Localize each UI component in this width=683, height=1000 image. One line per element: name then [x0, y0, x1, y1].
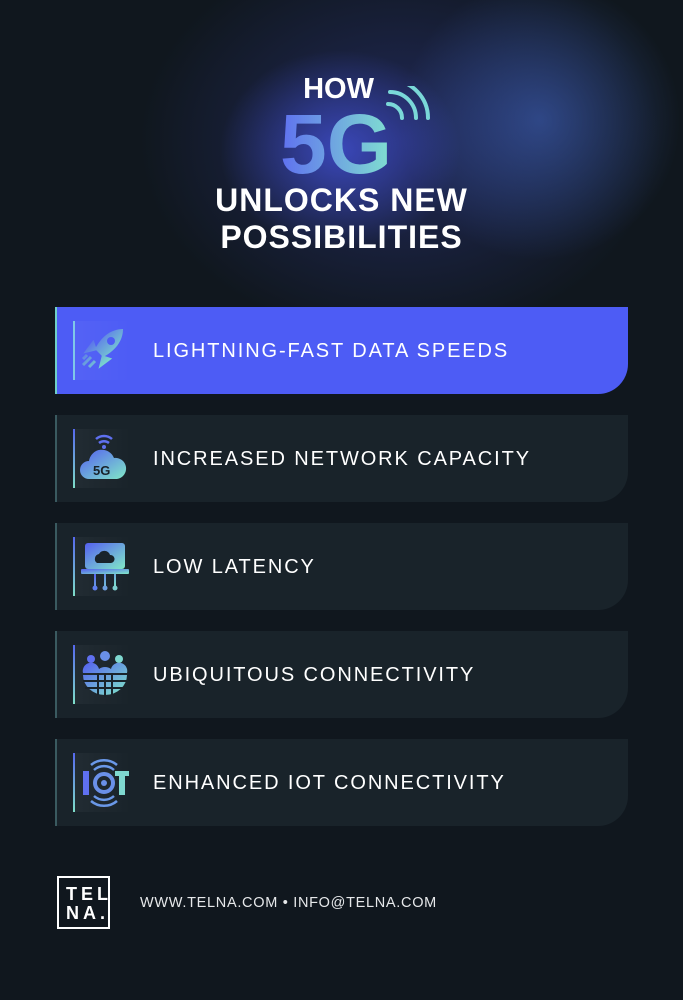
- label: UBIQUITOUS CONNECTIVITY: [153, 664, 475, 686]
- title: UNLOCKS NEW: UNLOCKS NEW: [215, 182, 468, 218]
- footer logo: NA.: [66, 903, 109, 923]
- card: enhanced IoT connectivity: [55, 739, 628, 826]
- label: LOW LATENCY: [153, 556, 316, 578]
- label: INCREASED NETWORK CAPACITY: [153, 448, 531, 470]
- card: increased network capacity: [55, 415, 628, 502]
- icon: IoT: [73, 753, 131, 812]
- icon: people globe: [73, 645, 131, 704]
- icon: 5G cloud: [73, 429, 131, 488]
- footer contact: WWW.TELNA.COM • INFO@TELNA.COM: [140, 895, 437, 911]
- footer logo: [57, 876, 110, 929]
- icon: rocket: [73, 321, 131, 380]
- title: HOW: HOW: [303, 73, 374, 105]
- title: POSSIBILITIES: POSSIBILITIES: [220, 219, 463, 255]
- title: [215, 73, 468, 255]
- title: 5G with signal: 5G: [280, 97, 392, 191]
- icon: laptop cloud: [73, 537, 131, 596]
- card: low latency: [55, 523, 628, 610]
- label: ENHANCED IOT CONNECTIVITY: [153, 772, 506, 794]
- card: lightning-fast data speeds: [55, 307, 628, 394]
- footer logo: TEL: [66, 884, 112, 904]
- title: 5G with signal: [280, 86, 430, 191]
- label: LIGHTNING-FAST DATA SPEEDS: [153, 340, 509, 362]
- card: ubiquitous connectivity: [55, 631, 628, 718]
- icon: 5G cloud: 5G: [93, 463, 110, 478]
